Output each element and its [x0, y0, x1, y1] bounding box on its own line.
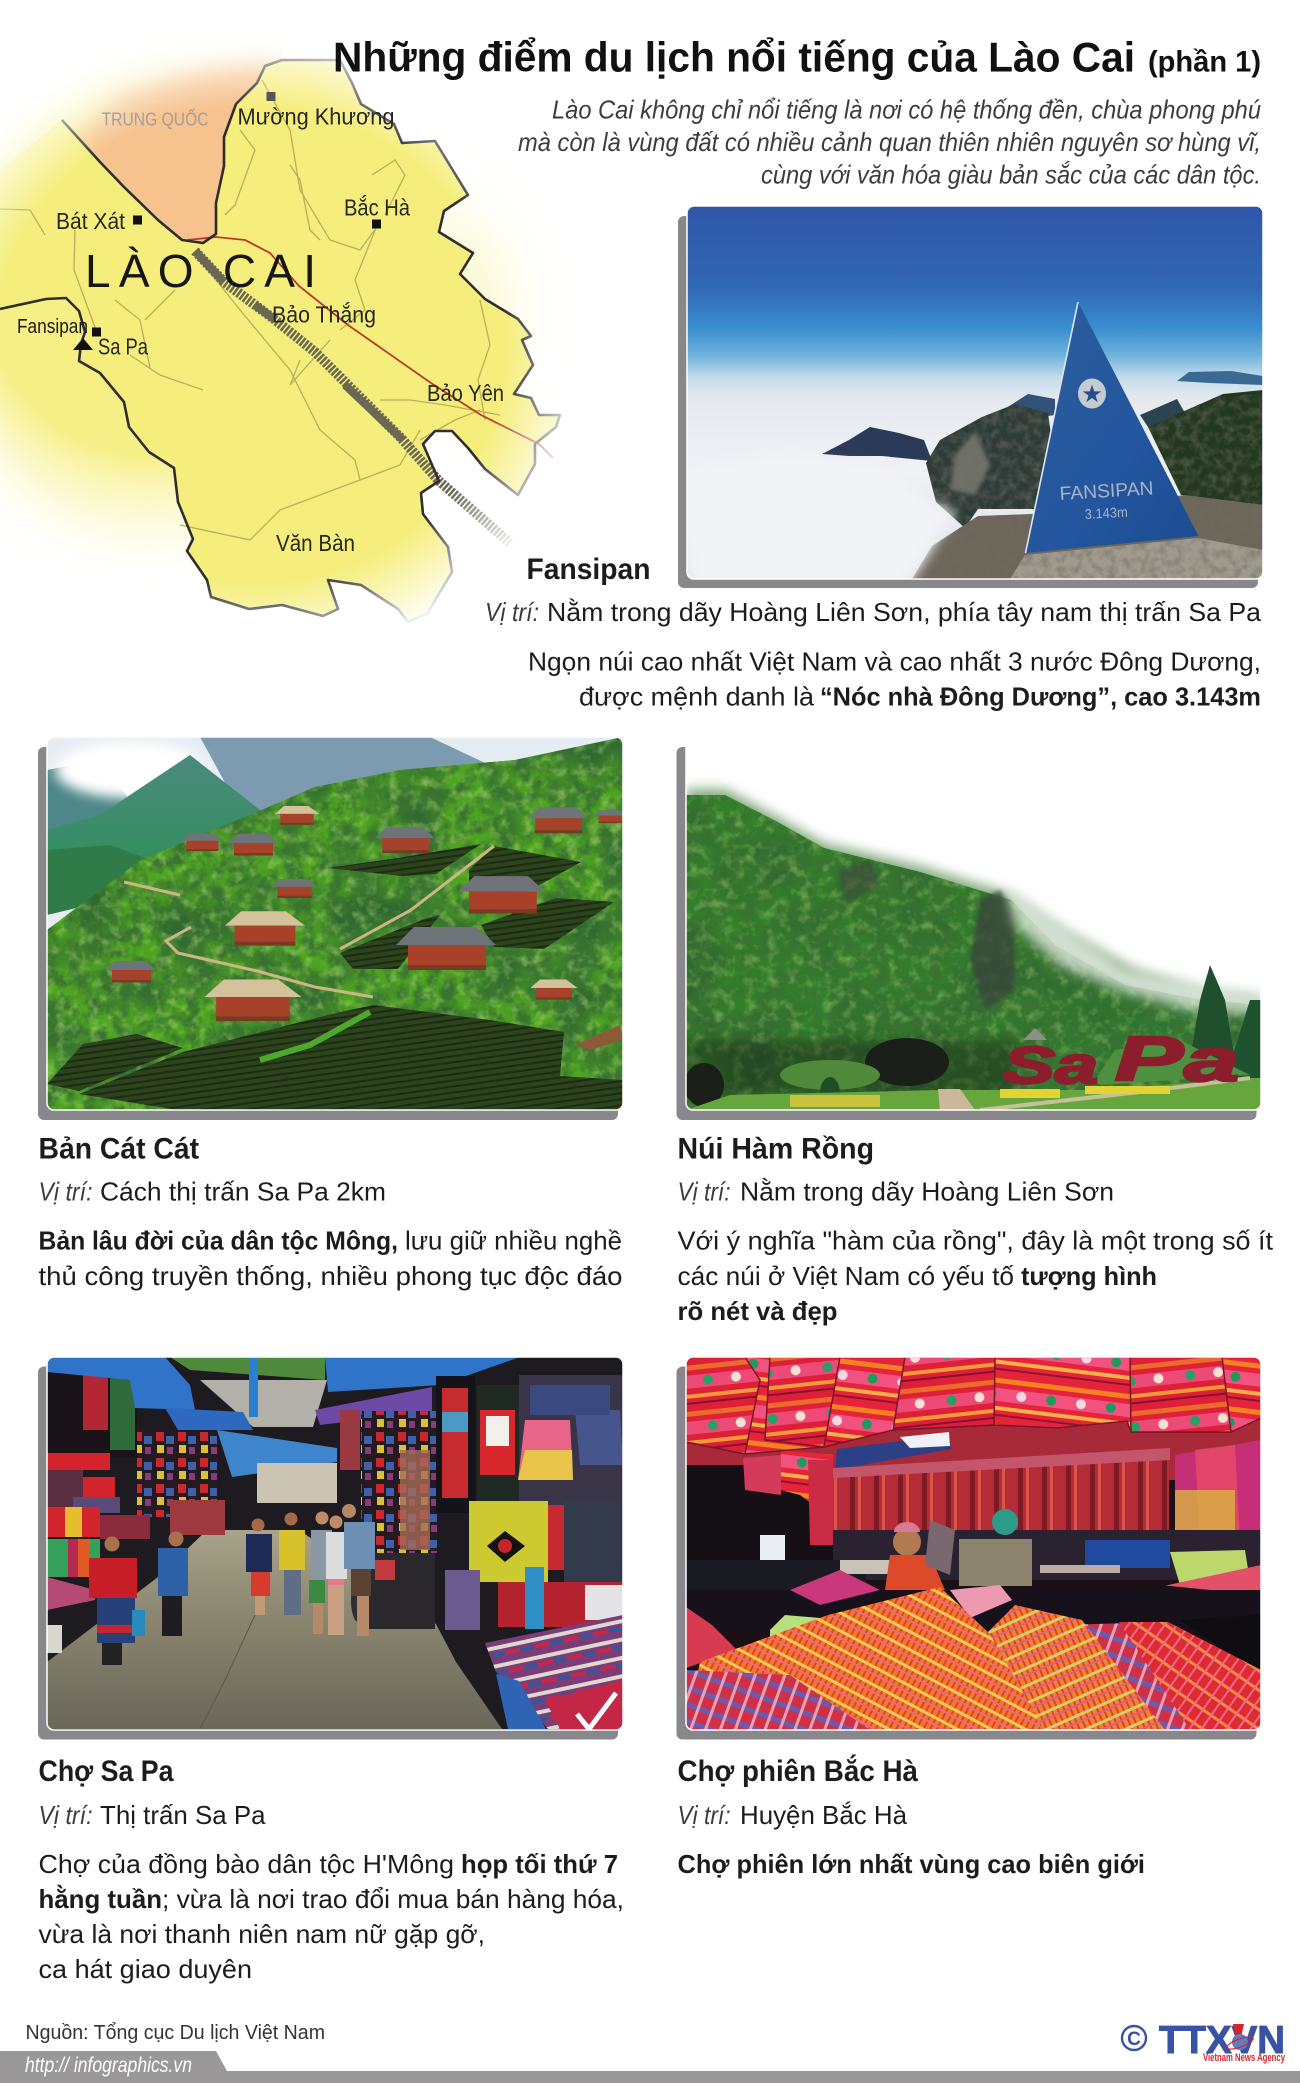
China region — [74, 52, 282, 242]
section: Bản Cát Cát: Bản lâu đời của dân tộc Mông, — [38, 1226, 398, 1256]
intro text: cùng với văn hóa giàu bản sắc của các dân tộc. — [761, 160, 1261, 190]
title: (phần 1) — [1148, 46, 1261, 78]
photo: Fansipan peak: FANSIPAN — [1059, 478, 1154, 505]
section: Bản Cát Cát: Bản Cát Cát — [38, 1132, 199, 1166]
section: Chợ Sa Pa: ca hát giao duyên — [38, 1954, 252, 1984]
map labels: Sa Pa — [98, 334, 148, 360]
section: Bản Cát Cát: Vị trí: — [38, 1176, 92, 1206]
section: Núi Hàm Rồng: rõ nét và đẹp — [678, 1296, 838, 1326]
map: Lào Cai province — [0, 49, 562, 624]
map labels — [17, 92, 504, 556]
section: Núi Hàm Rồng: Với ý nghĩa "hàm của rồng", đây là một trong số ít — [678, 1226, 1274, 1256]
intro text — [518, 94, 1261, 190]
section: Bản Cát Cát: thủ công truyền thống, nhiều phong tục độc đáo — [38, 1261, 622, 1291]
province shape — [0, 60, 560, 622]
section: Chợ phiên Bắc Hà: Huyện Bắc Hà — [740, 1800, 908, 1830]
railway — [195, 251, 510, 543]
photo: Fansipan peak — [678, 206, 1263, 590]
section: Núi Hàm Rồng — [678, 1132, 1274, 1326]
section: Chợ phiên Bắc Hà — [678, 1754, 1145, 1879]
section: Núi Hàm Rồng: Nằm trong dãy Hoàng Liên Sơn — [740, 1176, 1114, 1206]
photo: Fansipan peak: 3.143m — [1084, 504, 1128, 522]
province border — [0, 60, 560, 622]
section: Chợ Sa Pa: Chợ của đồng bào dân tộc H'Mông — [38, 1849, 454, 1879]
section: Núi Hàm Rồng: Vị trí: — [678, 1176, 730, 1206]
photo: Bản Cát Cát village — [38, 737, 625, 1120]
section: Chợ Sa Pa: Vị trí: — [38, 1800, 92, 1830]
flower letters: Sa — [1003, 1037, 1098, 1095]
flower letters — [1002, 1036, 1238, 1085]
main road — [187, 237, 553, 458]
star medallion: ★ — [1081, 380, 1103, 408]
section: Chợ Sa Pa — [38, 1755, 624, 1984]
map labels: Văn Bàn — [276, 530, 355, 556]
section: Chợ Sa Pa: hằng tuần — [38, 1884, 162, 1914]
section: Chợ phiên Bắc Hà: Chợ phiên lớn nhất vùng cao biên giới — [678, 1849, 1145, 1879]
photo: Chợ Sa Pa market — [38, 1357, 623, 1740]
source note: Nguồn: Tổng cục Du lịch Việt Nam — [26, 2022, 325, 2044]
section: Fansipan: Vị trí: — [485, 597, 539, 627]
section: Núi Hàm Rồng: Núi Hàm Rồng — [678, 1132, 874, 1166]
vendor and customer — [885, 1509, 1032, 1590]
section: Chợ Sa Pa: Thị trấn Sa Pa — [100, 1800, 266, 1830]
section: Núi Hàm Rồng: tượng hình — [1021, 1261, 1157, 1291]
map glow background — [0, 54, 222, 560]
map labels: TRUNG QUỐC — [102, 108, 209, 130]
map labels: Mường Khương — [238, 104, 394, 130]
section: Chợ Sa Pa: Chợ Sa Pa — [38, 1755, 174, 1788]
people — [89, 1504, 435, 1665]
photo: Núi Hàm Rồng mountain — [676, 737, 1262, 1120]
section: Fansipan — [485, 553, 1262, 712]
section: Chợ Sa Pa: họp tối thứ 7 — [461, 1849, 618, 1879]
logo: TTXVN: TTXVN — [1159, 2019, 1285, 2062]
footer band — [0, 2051, 1300, 2083]
section: Bản Cát Cát — [38, 1132, 622, 1291]
map labels: Bát Xát — [56, 208, 126, 234]
section: Fansipan: Fansipan — [526, 553, 650, 586]
section: Chợ Sa Pa: ; vừa là nơi trao đổi mua bán hàng hóa, — [162, 1884, 624, 1914]
section: Fansipan: Nằm trong dãy Hoàng Liên Sơn, phía tây nam thị trấn Sa Pa — [547, 597, 1262, 627]
footer band: http:// infographics.vn — [25, 2054, 192, 2077]
section: Fansipan: “Nóc nhà Đông Dương”, cao 3.143m — [820, 682, 1261, 712]
section: Bản Cát Cát: Cách thị trấn Sa Pa 2km — [100, 1176, 386, 1206]
section: Núi Hàm Rồng: các núi ở Việt Nam có yếu tố — [678, 1261, 1014, 1291]
flower letters: a — [1184, 1027, 1239, 1094]
map labels: Bảo Thắng — [272, 302, 376, 328]
logo: TTXVN: C — [1127, 2029, 1141, 2050]
map labels: Bắc Hà — [344, 194, 410, 220]
photo: Chợ phiên Bắc Hà textiles — [676, 1357, 1261, 1740]
section: Chợ phiên Bắc Hà: Chợ phiên Bắc Hà — [678, 1754, 918, 1788]
hanging embroidered cloth panels — [686, 1357, 1261, 1454]
map labels: Fansipan — [17, 316, 88, 338]
minor roads and rivers — [0, 80, 500, 540]
section: Fansipan: Ngọn núi cao nhất Việt Nam và cao nhất 3 nước Đông Dương, — [528, 646, 1261, 676]
section: Chợ phiên Bắc Hà: Vị trí: — [678, 1800, 730, 1830]
title: Những điểm du lịch nổi tiếng của Lào Cai — [333, 34, 1135, 80]
map labels: Bảo Yên — [427, 380, 504, 406]
section: Fansipan: được mệnh danh là — [579, 682, 815, 712]
section: Chợ Sa Pa: vừa là nơi thanh niên nam nữ gặp gỡ, — [38, 1919, 485, 1949]
section: Bản Cát Cát: lưu giữ nhiều nghề — [405, 1226, 622, 1256]
flower letters: P — [1115, 1025, 1184, 1094]
map labels: LÀO CAI — [85, 245, 316, 297]
